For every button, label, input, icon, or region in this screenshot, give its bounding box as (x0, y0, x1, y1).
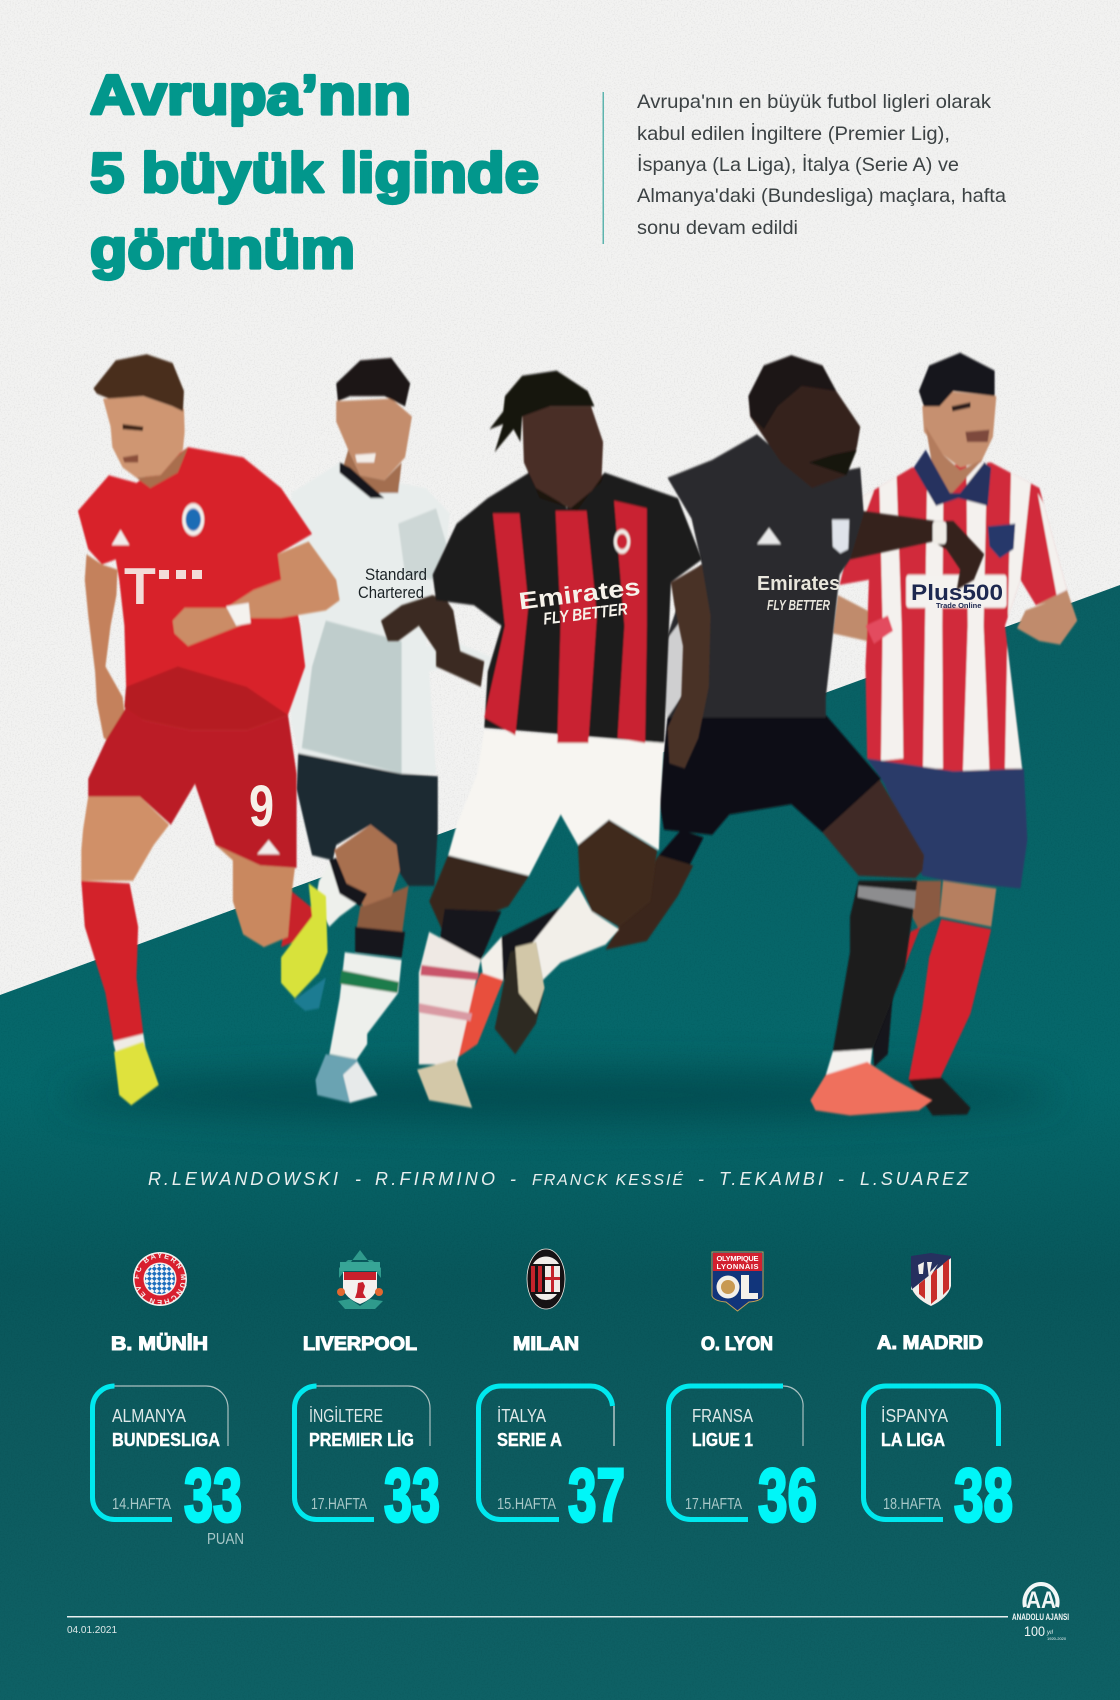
card: Almanya Bundesliga: 14.HAFTA (112, 1496, 171, 1513)
title: 5 büyük liginde (90, 141, 539, 204)
players' names (148, 1169, 969, 1189)
card: İspanya La Liga: LA LIGA (881, 1430, 945, 1450)
player: R. Lewandowski (78, 354, 340, 1105)
card: Fransa Ligue 1: 36 (758, 1453, 817, 1537)
icon: Lyon crest: LYONNAIS (716, 1262, 758, 1271)
card: Fransa Ligue 1: LIGUE 1 (692, 1430, 753, 1450)
jersey text: Lewandowski sponsor and number: T (124, 558, 156, 616)
jersey text: Firmino sponsor (358, 565, 427, 602)
icon: Atletico crest (911, 1253, 951, 1306)
icon: Lyon crest (712, 1252, 763, 1311)
icon: Lyon crest: OLYMPIQUE (716, 1254, 758, 1263)
logo: Anadolu Ajansı 100. yıl: 100 (1024, 1623, 1045, 1639)
player: L. Suarez (833, 353, 1077, 1116)
logo: Anadolu Ajansı 100. yıl: yıl (1046, 1630, 1054, 1636)
jersey text: Ekambi sponsor: Emirates (757, 573, 840, 595)
players' names: R.LEWANDOWSKI (148, 1169, 338, 1189)
card: İtalya Serie A: SERIE A (497, 1430, 562, 1450)
jersey text: Kessié sponsor (517, 574, 644, 631)
jersey text: Suarez sponsor: Plus500 (911, 580, 1003, 605)
team names: O. LYON (701, 1334, 773, 1355)
card: İngiltere Premier Lig: 33 (384, 1453, 440, 1537)
jersey text: Firmino sponsor: Chartered (358, 583, 424, 602)
ground shadow under players (60, 1069, 1060, 1121)
jersey text: Firmino sponsor: Standard (365, 565, 427, 584)
icon: Milan crest (527, 1249, 565, 1309)
card: İngiltere Premier Lig (294, 1386, 440, 1537)
players' names: FRANCK KESSIÉ (532, 1170, 683, 1189)
card: İspanya La Liga (864, 1386, 1013, 1537)
player: R. Firmino (290, 358, 501, 1103)
team names: A. MADRID (877, 1333, 983, 1354)
intro text (637, 91, 1006, 239)
card: İtalya Serie A: 37 (568, 1453, 625, 1537)
jersey text: Ekambi sponsor (757, 573, 840, 614)
card: İtalya Serie A: 15.HAFTA (497, 1496, 556, 1513)
card: Almanya Bundesliga (92, 1386, 244, 1548)
players' names: - (838, 1169, 844, 1189)
title (90, 63, 539, 280)
card: İtalya Serie A: İTALYA (497, 1406, 546, 1426)
background: teal diagonal panel (0, 585, 1120, 1700)
card: Almanya Bundesliga: ALMANYA (112, 1406, 186, 1426)
card: İngiltere Premier Lig: İNGİLTERE (309, 1406, 383, 1426)
icon: Bayern crest: FC BAYERN MÜNCHEN EV (134, 1254, 187, 1304)
card: İngiltere Premier Lig: 17.HAFTA (311, 1496, 367, 1513)
card: Almanya Bundesliga: BUNDESLIGA (112, 1430, 220, 1450)
jersey text: Ekambi sponsor: FLY BETTER (767, 597, 830, 614)
players' names: T.EKAMBI (719, 1169, 823, 1189)
jersey text: Lewandowski sponsor and number (124, 558, 274, 839)
jersey text: Kessié sponsor: FLY BETTER (542, 599, 629, 629)
player: F. Kessié (381, 371, 711, 1108)
team names: B. MÜNİH (111, 1334, 208, 1355)
players' names: - (510, 1169, 516, 1189)
intro text: Almanya'daki (Bundesliga) maçlara, hafta (637, 185, 1006, 207)
logo: Anadolu Ajansı 100. yıl (1012, 1584, 1069, 1641)
logo: Anadolu Ajansı 100. yıl: AA (1026, 1587, 1056, 1614)
divider line (602, 92, 604, 244)
card: İtalya Serie A (478, 1386, 625, 1537)
team names: LIVERPOOL (303, 1334, 417, 1355)
date: 04.01.2021 (67, 1625, 117, 1636)
intro text: sonu devam edildi (637, 217, 798, 239)
card: Almanya Bundesliga: 33 (184, 1453, 242, 1537)
logo: Anadolu Ajansı 100. yıl: 1920-2020 (1047, 1636, 1067, 1641)
intro text: İspanya (La Liga), İtalya (Serie A) ve (637, 153, 959, 176)
players' names: L.SUAREZ (860, 1169, 969, 1189)
intro text: kabul edilen İngiltere (Premier Lig), (637, 122, 950, 145)
player: T. Ekambi (605, 355, 984, 1116)
intro text: Avrupa'nın en büyük futbol ligleri olarak (637, 91, 991, 113)
jersey text: Suarez sponsor: Trade Online (936, 601, 981, 610)
card: Fransa Ligue 1 (668, 1386, 817, 1537)
logo: Anadolu Ajansı 100. yıl: ANADOLU AJANSI (1012, 1612, 1069, 1623)
footer rule (67, 1616, 1008, 1618)
card: Fransa Ligue 1: 17.HAFTA (685, 1496, 742, 1513)
card: İngiltere Premier Lig: PREMIER LİG (309, 1430, 414, 1450)
card: İspanya La Liga: 18.HAFTA (883, 1496, 941, 1513)
team names: MILAN (513, 1334, 579, 1355)
jersey text: Lewandowski sponsor and number: 9 (249, 774, 274, 839)
card: İspanya La Liga: İSPANYA (881, 1406, 948, 1426)
card: Fransa Ligue 1: FRANSA (692, 1406, 753, 1426)
title: Avrupa’nın (90, 63, 411, 126)
title: görünüm (90, 217, 355, 280)
team names (111, 1333, 983, 1355)
players' names: - (355, 1169, 361, 1189)
players' names: - (698, 1169, 704, 1189)
players' names: R.FIRMINO (375, 1169, 495, 1189)
card: İspanya La Liga: 38 (954, 1453, 1013, 1537)
card: Almanya Bundesliga: PUAN (207, 1531, 244, 1548)
jersey text: Kessié sponsor: Emirates (517, 574, 642, 615)
icon: Liverpool crest (337, 1250, 383, 1309)
